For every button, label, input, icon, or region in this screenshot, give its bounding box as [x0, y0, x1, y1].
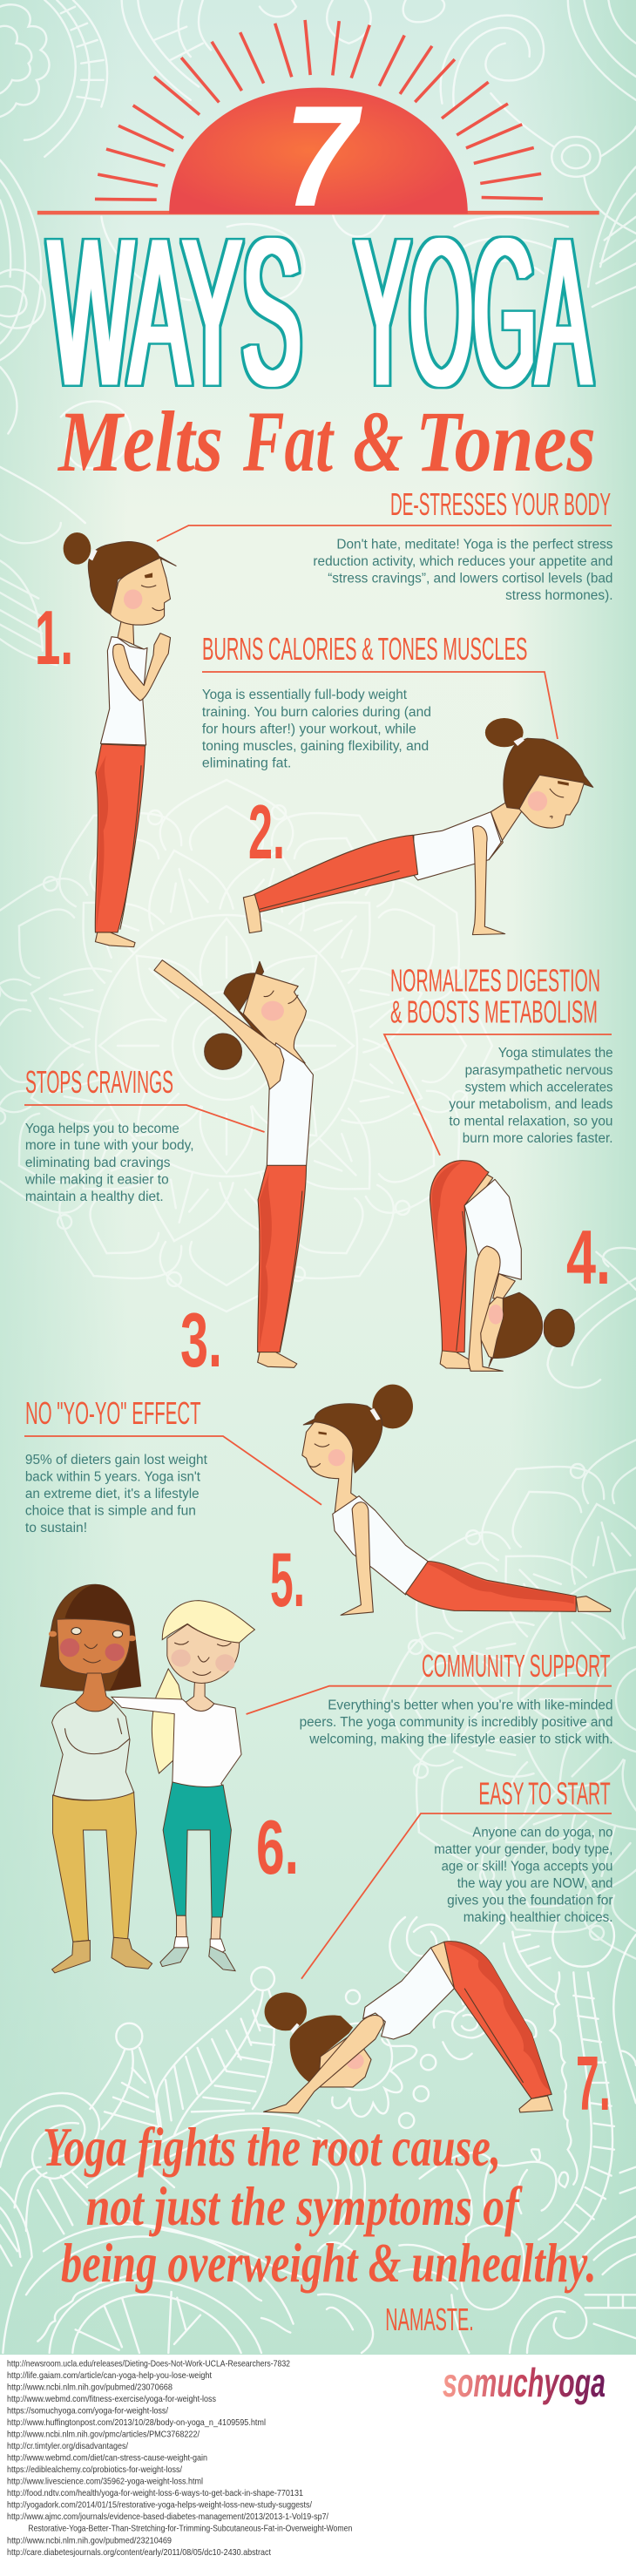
- text block: [300, 1698, 613, 1747]
- background lace pattern: bottom right: [318, 1917, 636, 2353]
- text block: toning muscles, gaining flexibility, and: [202, 739, 429, 754]
- references list: https://somuchyoga.com/yoga-for-weight-loss/: [7, 2406, 168, 2416]
- text block: Yoga is essentially full-body weight: [202, 688, 408, 702]
- background mandala: centre: [0, 776, 496, 1315]
- connector line: [157, 525, 612, 541]
- friend with dark hair: [41, 1584, 152, 1973]
- connector line: [384, 1034, 612, 1156]
- text block: eliminating fat.: [202, 756, 291, 771]
- panel: 2 burns calories and tones muscles: [202, 631, 558, 771]
- text block: matter your gender, body type,: [434, 1842, 613, 1857]
- panel: 6 community support: [247, 1648, 613, 1747]
- subtitle: Melts Fat & Tones: &: [353, 393, 403, 490]
- number 3: 3.: [180, 1297, 222, 1383]
- text block: [313, 537, 613, 603]
- references list: http://www.ncbi.nlm.nih.gov/pubmed/23070668: [7, 2383, 173, 2392]
- references list: http://yogadork.com/2014/01/15/restorative-yoga-helps-weight-loss-new-study-suggests/: [7, 2501, 312, 2511]
- text block: gives you the foundation for: [447, 1893, 613, 1908]
- text block: the way you are NOW, and: [457, 1876, 613, 1891]
- text block: system which accelerates: [465, 1081, 613, 1095]
- text block: training. You burn calories during (and: [202, 705, 431, 720]
- text block: Everything's better when you're with like-minded: [328, 1698, 613, 1713]
- illustration: figure 3 raised arms pose: [154, 960, 313, 1367]
- text block: choice that is simple and fun: [25, 1504, 196, 1519]
- references list: http://www.livescience.com/35962-yoga-weight-loss.html: [7, 2478, 203, 2487]
- illustration: figure 2 plank pose: [243, 718, 593, 935]
- panel: 1 de-stresses your body: [157, 486, 613, 603]
- connector line: [202, 672, 558, 739]
- icon: sun half disc: [169, 88, 468, 214]
- title numeral 7: 7: [284, 76, 363, 236]
- references list: http://www.webmd.com/fitness-exercise/yoga-for-weight-loss: [7, 2395, 216, 2404]
- references list: http://cr.timtyler.org/disadvantages/: [7, 2442, 128, 2451]
- text block: for hours after!) your workout, while: [202, 722, 416, 736]
- namaste sign-off: NAMASTE.: [385, 2301, 474, 2337]
- references list: [7, 2359, 352, 2558]
- text block: maintain a healthy diet.: [25, 1190, 164, 1204]
- text block: [25, 1453, 208, 1535]
- background lace pattern: lower right swirl: [548, 1248, 636, 1387]
- illustration: figure 7 downward dog pose: [264, 1942, 552, 2113]
- number 4: 4.: [566, 1214, 611, 1300]
- heading: [390, 962, 600, 1029]
- subtitle: Melts Fat & Tones: Tones: [416, 393, 596, 490]
- background lace pattern: bottom left: [0, 1967, 320, 2353]
- text block: [434, 1825, 613, 1925]
- text block: Yoga stimulates the: [498, 1046, 613, 1061]
- panel: 3 stops cravings: [24, 1064, 265, 1204]
- references list: http://www.huffingtonpost.com/2013/10/28/body-on-yoga_n_4109595.html: [7, 2418, 266, 2428]
- text block: to sustain!: [25, 1521, 87, 1535]
- closing statement: not just the symptoms of: [86, 2175, 523, 2237]
- text block: to mental relaxation, so you: [449, 1115, 613, 1129]
- subtitle: Melts Fat & Tones: Melts: [57, 393, 223, 490]
- closing statement: [43, 2116, 597, 2294]
- friend with blonde hair: [112, 1601, 254, 1971]
- text block: “stress cravings”, and lowers cortisol levels (bad: [328, 571, 613, 586]
- heading: NO "YO-YO" EFFECT: [25, 1395, 201, 1431]
- text block: reduction activity, which reduces your appetite and: [313, 554, 613, 569]
- references list: http://life.gaiam.com/article/can-yoga-help-you-lose-weight: [7, 2371, 212, 2381]
- title: WAYS YOGA: WAYS: [49, 195, 301, 429]
- text block: eliminating bad cravings: [25, 1156, 171, 1170]
- text block: [202, 688, 431, 771]
- subtitle: Melts Fat & Tones: Fat: [242, 393, 335, 490]
- text block: Don't hate, meditate! Yoga is the perfect stress: [336, 537, 613, 552]
- panel: 5 no yo-yo effect: [24, 1395, 321, 1535]
- references list: http://www.ajmc.com/journals/evidence-based-diabetes-management/2013/2013-1-Vol19-sp7/: [7, 2512, 328, 2522]
- illustration: two friends: [41, 1584, 254, 1973]
- heading: STOPS CRAVINGS: [25, 1064, 173, 1100]
- panel: 4 normalizes digestion and boosts metabolism: [384, 962, 613, 1156]
- text block: [449, 1046, 613, 1146]
- references list: http://care.diabetesjournals.org/content/early/2011/08/05/dc10-2430.abstract: [7, 2548, 271, 2558]
- text block: age or skill! Yoga accepts you: [442, 1859, 613, 1874]
- references list: https://ediblealchemy.co/probiotics-for-weight-loss/: [7, 2465, 182, 2475]
- background mandala: right: [380, 1430, 636, 1969]
- number 6: 6.: [256, 1804, 299, 1890]
- sun with rays: [37, 20, 599, 214]
- references list: http://www.webmd.com/diet/can-stress-cause-weight-gain: [7, 2454, 207, 2463]
- text block: welcoming, making the lifestyle easier to stick with.: [308, 1732, 613, 1747]
- illustration: figure 4 forward fold pose: [430, 1161, 574, 1371]
- text block: parasympathetic nervous: [465, 1063, 613, 1078]
- references list: http://newsroom.ucla.edu/releases/Dieting-Does-Not-Work-UCLA-Researchers-7832: [7, 2359, 290, 2369]
- text block: peers. The yoga community is incredibly positive and: [300, 1715, 613, 1730]
- text block: burn more calories faster.: [463, 1131, 613, 1146]
- connector line: [24, 1105, 265, 1132]
- text block: back within 5 years. Yoga isn't: [25, 1470, 201, 1485]
- number 5: 5.: [270, 1536, 305, 1623]
- text block: an extreme diet, it's a lifestyle: [25, 1487, 200, 1502]
- text block: making healthier choices.: [463, 1910, 613, 1925]
- text block: while making it easier to: [24, 1173, 169, 1188]
- references list: Restorative-Yoga-Better-Than-Stretching-for-Trimming-Subcutaneous-Fat-in-Overweight-Women: [28, 2525, 352, 2534]
- text block: [24, 1122, 194, 1204]
- references list: http://www.ncbi.nlm.nih.gov/pubmed/23210469: [7, 2536, 172, 2545]
- references list: http://food.ndtv.com/health/yoga-for-weight-loss-6-ways-to-get-back-in-shape-770131: [7, 2489, 303, 2498]
- background lace pattern: top: [0, 0, 636, 523]
- connector line: [24, 1436, 321, 1505]
- illustration: figure 1 standing prayer pose: [64, 532, 176, 947]
- panel: 7 easy to start: [301, 1776, 613, 1979]
- closing statement: Yoga fights the root cause,: [43, 2116, 501, 2178]
- number 2: 2.: [248, 789, 285, 875]
- text block: Yoga helps you to become: [25, 1122, 179, 1136]
- text block: Anyone can do yoga, no: [472, 1825, 613, 1840]
- connector line: [301, 1813, 612, 1979]
- ground line: [37, 211, 599, 214]
- connector line: [247, 1686, 612, 1714]
- text block: stress hormones).: [505, 588, 613, 603]
- icon: sun rays: [95, 20, 543, 200]
- text block: more in tune with your body,: [25, 1138, 194, 1153]
- number 1: 1.: [35, 594, 73, 681]
- subtitle: Melts Fat & Tones: [57, 393, 596, 490]
- text block: 95% of dieters gain lost weight: [25, 1453, 208, 1468]
- illustration: figure 5 cobra pose: [302, 1385, 611, 1615]
- footer background: [0, 2355, 636, 2576]
- references list: http://www.ncbi.nlm.nih.gov/pmc/articles/PMC3768222/: [7, 2430, 200, 2440]
- text block: your metabolism, and leads: [449, 1097, 613, 1112]
- background lace pattern: upper left leaf: [0, 523, 61, 665]
